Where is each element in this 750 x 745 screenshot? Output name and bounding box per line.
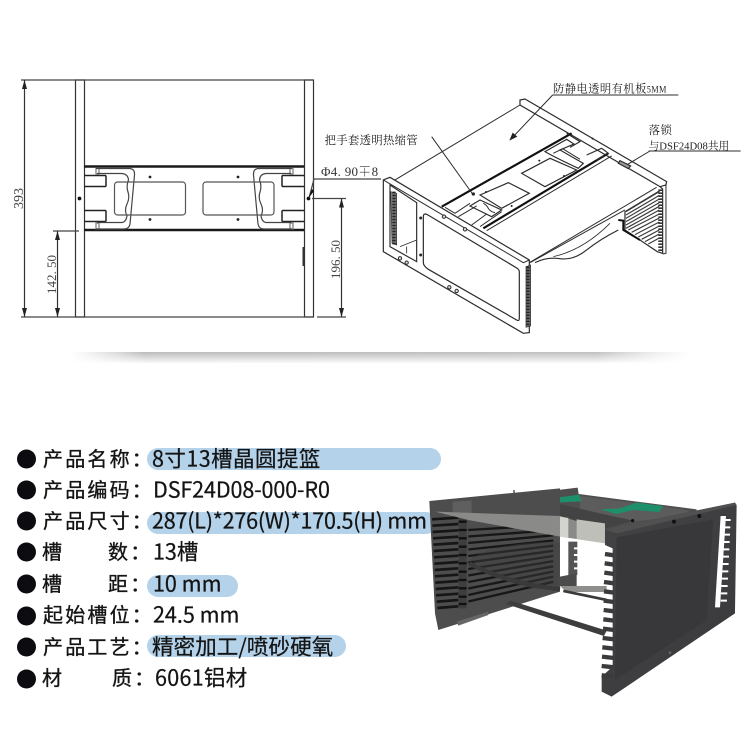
row: product code: DSF24D08-000-R0 xyxy=(153,474,330,504)
product specification list xyxy=(17,442,441,692)
product photo: wafer basket xyxy=(429,488,737,697)
rear slot post xyxy=(560,537,607,592)
reflection shadow band xyxy=(70,352,690,364)
callout: latch: 落锁 xyxy=(649,123,672,137)
row: slot pitch: 槽 xyxy=(42,568,62,597)
row: product size: 产品尺寸： xyxy=(43,505,154,534)
left post xyxy=(76,80,84,317)
row: product name: 8寸13槽晶圆提篮 xyxy=(152,442,321,474)
row: starting slot position: 起始槽位： xyxy=(43,599,154,628)
row: material: 6061铝材 xyxy=(155,662,248,692)
row: product name xyxy=(43,442,321,474)
row: slot pitch: 10 mm xyxy=(153,568,222,598)
rear end plate and slots xyxy=(520,99,667,254)
front end plate xyxy=(602,503,737,697)
row: slot pitch xyxy=(42,568,222,598)
front view technical drawing xyxy=(12,80,381,317)
clear acrylic sheet xyxy=(435,512,607,543)
row: slot count: 槽 xyxy=(42,536,62,565)
row: material: 质： xyxy=(112,662,156,691)
isometric technical drawing xyxy=(325,82,741,333)
row: slot pitch: 距： xyxy=(108,568,152,597)
row: material: 材 xyxy=(42,662,62,691)
handle bar frame xyxy=(442,133,612,231)
dimension 142.50: 142. 50 xyxy=(44,255,59,294)
row: slot count: 13槽 xyxy=(153,536,198,566)
row: product code xyxy=(43,474,330,504)
front end plate xyxy=(383,177,531,333)
mounting holes and latch xyxy=(78,197,310,266)
callout: latch: 与DSF24D08共用 xyxy=(649,139,729,152)
callout: handle sleeve xyxy=(325,133,475,196)
top and bottom edges xyxy=(21,80,313,317)
row: starting slot position xyxy=(43,598,239,630)
callout: anti-static acrylic: 防静电透明有机板5MM xyxy=(553,82,667,96)
dimension 196.50 xyxy=(312,198,346,317)
row: product size: 287(L)*276(W)*170.5(H) mm xyxy=(152,504,427,536)
rear end plate with slots xyxy=(429,488,560,630)
row: process: 产品工艺： xyxy=(43,631,154,660)
row: slot count: 数： xyxy=(108,536,152,565)
dimension 393 xyxy=(12,80,27,317)
bottom bar xyxy=(506,591,607,636)
row: process xyxy=(43,630,333,662)
row: product code: 产品编码： xyxy=(43,474,154,503)
right post xyxy=(304,80,314,317)
row: process: 精密加工/喷砂硬氧 xyxy=(152,630,333,662)
row: product name: 产品名称： xyxy=(43,443,154,472)
wafer disc xyxy=(469,542,560,590)
callout: anti-static acrylic xyxy=(509,82,678,141)
wafer disc edge and bottom bar xyxy=(530,210,640,263)
handle band xyxy=(84,166,304,230)
row: slot count xyxy=(42,536,198,566)
highlight pills xyxy=(147,448,441,657)
top frame bars xyxy=(488,488,697,530)
row: material xyxy=(42,662,248,692)
dimension 142.50 xyxy=(44,231,79,317)
hole callout: Φ4. 90∓8 xyxy=(321,164,378,179)
acrylic sheet outline xyxy=(395,105,657,263)
dimension 196.50: 196. 50 xyxy=(328,240,343,279)
callout: handle sleeve: 把手套透明热缩管 xyxy=(325,133,418,147)
row: starting slot position: 24.5 mm xyxy=(153,598,239,630)
dimension 393: 393 xyxy=(12,188,27,209)
bullets xyxy=(17,450,36,688)
hole callout xyxy=(308,164,381,199)
callout: latch xyxy=(618,123,741,169)
